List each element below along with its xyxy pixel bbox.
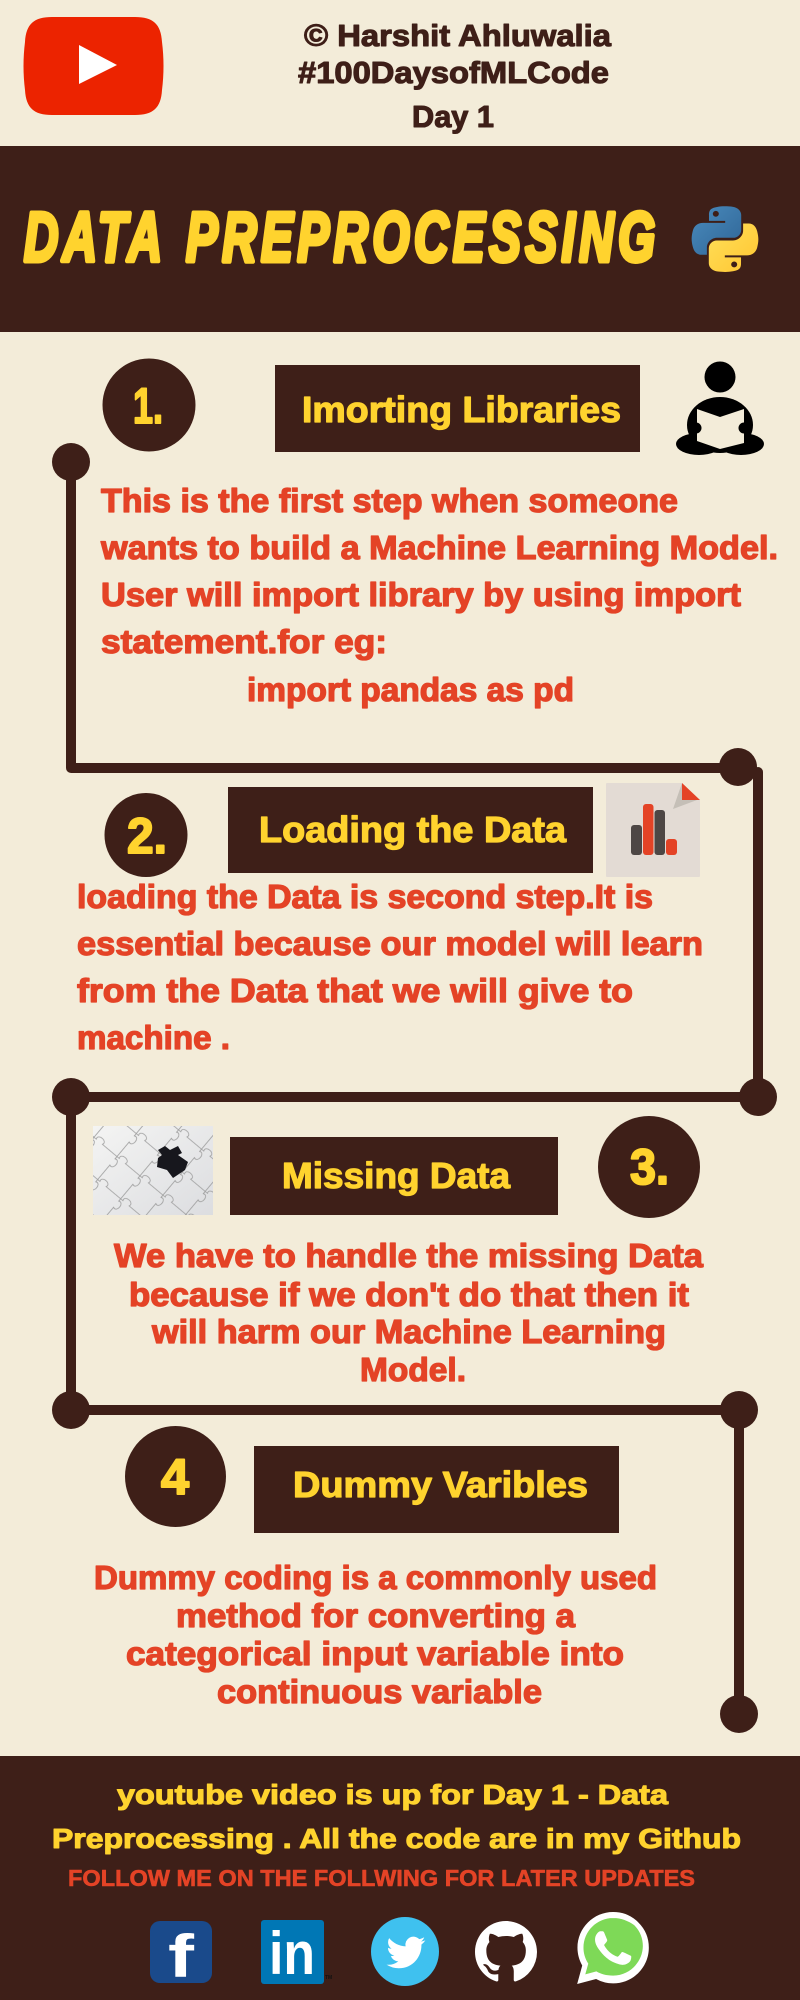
step 4 body text: method for converting a (176, 1597, 576, 1634)
step 3 body text: because if we don't do that then it (129, 1276, 689, 1313)
step 1 heading (275, 365, 640, 452)
step 3 body text: Model. (360, 1351, 466, 1388)
step 3 number badge (598, 1116, 700, 1218)
panel: title banner (0, 146, 800, 332)
panel: footer (0, 1756, 800, 2000)
panel: step 4 (94, 1426, 657, 1710)
step 3 heading: Missing Data (282, 1155, 511, 1196)
step 1 number badge (102, 358, 196, 452)
header credits: © Harshit Ahluwalia (304, 18, 612, 53)
title: DATA (24, 198, 162, 276)
panel: step 2 (77, 783, 703, 1056)
step 3 body text: We have to handle the missing Data (114, 1237, 704, 1274)
step 2 body text: essential because our model will learn (77, 925, 703, 962)
step 3 number badge: 3. (630, 1139, 669, 1195)
icon: facebook: f (168, 1923, 195, 1990)
step 2 heading (228, 787, 593, 873)
step 1 number badge: 1. (133, 378, 163, 434)
step 4 body text: Dummy coding is a commonly used (94, 1559, 657, 1596)
step 4 body text: continuous variable (217, 1673, 542, 1710)
step 4 number badge: 4 (161, 1449, 189, 1505)
step 2 number badge: 2. (127, 808, 167, 864)
icon: whatsapp (577, 1912, 649, 1984)
step 1 body text: This is the first step when someone (101, 482, 678, 519)
header credits: #100DaysofMLCode (298, 55, 609, 90)
icon: bar chart document (606, 783, 700, 877)
step 1 heading: Imorting Libraries (302, 389, 621, 430)
step 1 body text: import pandas as pd (247, 671, 574, 708)
icon: linkedin: TM (325, 1975, 332, 1981)
step 4 body text: categorical input variable into (126, 1635, 624, 1672)
step 2 heading: Loading the Data (259, 809, 567, 850)
title: PREPROCESSING (186, 198, 655, 276)
step 2 body text: loading the Data is second step.It is (77, 878, 653, 915)
panel: step 3 (93, 1116, 704, 1388)
icon: twitter (371, 1917, 439, 1986)
step 1 body text: wants to build a Machine Learning Model. (100, 529, 778, 566)
step 3 body text (114, 1237, 704, 1388)
step 1 body text: User will import library by using import (101, 576, 741, 613)
step 4 heading (254, 1446, 619, 1533)
icon: person reading (676, 362, 764, 455)
step 1 body text (100, 482, 778, 708)
panel: step 1 (100, 358, 778, 708)
icon: linkedin: in (269, 1920, 315, 1987)
header credits (298, 18, 612, 134)
step 1 body text: statement.for eg: (101, 623, 387, 660)
step 4 body text (94, 1559, 657, 1710)
step 2 body text (77, 878, 703, 1056)
icon: python logo (692, 206, 758, 272)
footer message (52, 1779, 741, 1854)
footer message: Preprocessing . All the code are in my Github (52, 1823, 741, 1854)
step 2 number badge (104, 793, 188, 877)
step 2 body text: machine . (77, 1019, 230, 1056)
step 3 body text: will harm our Machine Learning (151, 1313, 666, 1350)
step 3 heading (230, 1137, 558, 1215)
footer message: youtube video is up for Day 1 - Data (117, 1779, 668, 1810)
timeline connector (52, 443, 777, 1733)
icon: puzzle with missing piece (93, 1126, 213, 1215)
follow me line: FOLLOW ME ON THE FOLLWING FOR LATER UPDATES (68, 1865, 695, 1891)
step 4 heading: Dummy Varibles (293, 1464, 588, 1505)
icon: github (475, 1921, 537, 1981)
header credits: Day 1 (412, 99, 494, 134)
step 2 body text: from the Data that we will give to (77, 972, 633, 1009)
icon: youtube logo (24, 17, 164, 115)
icon: facebook (150, 1921, 212, 1990)
step 4 number badge (125, 1426, 226, 1527)
